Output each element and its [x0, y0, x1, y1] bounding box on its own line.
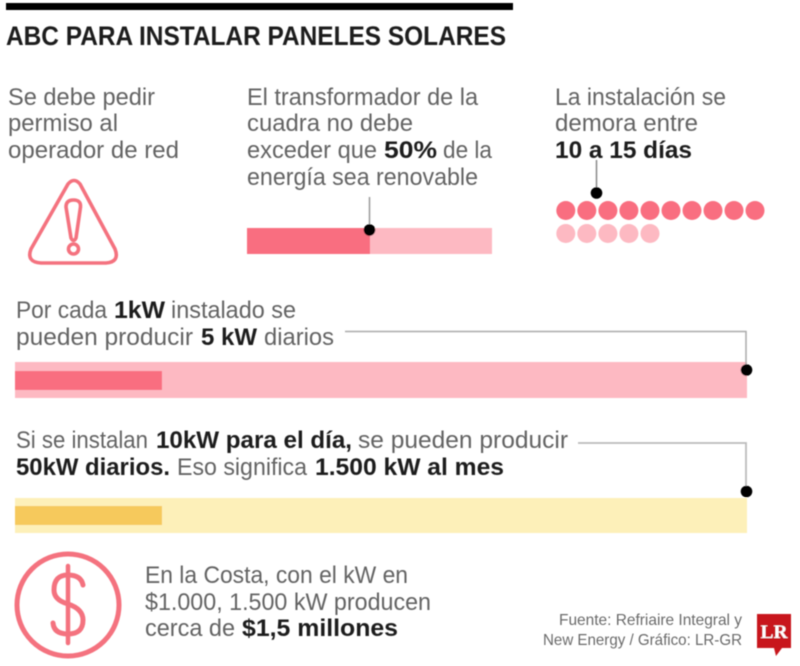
panel: transformer — [247, 84, 493, 254]
source credit — [543, 612, 742, 649]
text: savings — [145, 562, 431, 642]
text: 10 kW production: 50kW diarios. — [16, 454, 170, 481]
source credit: Fuente: Refriaire Integral y — [559, 612, 742, 629]
text: installation days: 10 a 15 días — [555, 137, 692, 164]
source credit: New Energy / Gráfico: LR-GR — [543, 632, 742, 649]
panel: 10 kW production — [15, 427, 752, 533]
text: 10 kW production: 1.500 kW al mes — [315, 454, 504, 481]
panel: installation days — [555, 84, 764, 243]
text: 1 kW production: Por cada — [16, 297, 108, 324]
text: savings: En la Costa, con el kW en — [145, 562, 408, 589]
text: 10 kW production: se pueden producir — [358, 427, 568, 454]
text: transformer: El transformador de la — [247, 84, 479, 111]
text: transformer: energía sea renovable — [247, 164, 478, 191]
text: installation days: La instalación se — [555, 84, 726, 111]
text: 1 kW production — [16, 297, 334, 351]
title: ABC PARA INSTALAR PANELES SOLARES — [6, 21, 506, 51]
logo: LR: LR — [760, 622, 788, 643]
panel: permit — [8, 84, 179, 263]
text: permit — [8, 84, 179, 164]
panel: 1 kW production — [15, 297, 752, 398]
text: 10 kW production: Si se instalan — [16, 427, 148, 454]
bar: 10 kW vs 50 kW — [15, 443, 752, 533]
bar: 50 percent — [247, 197, 492, 254]
text: 1 kW production: 1kW — [114, 297, 165, 324]
panel: savings — [17, 554, 431, 656]
text: 1 kW production: 5 kW — [201, 324, 257, 351]
text: installation days — [555, 84, 726, 164]
text: transformer: cuadra no debe — [247, 110, 413, 137]
text: savings: $1.000, 1.500 kW producen — [145, 589, 431, 616]
text: savings: cerca de — [145, 615, 235, 642]
text: transformer: exceder que — [247, 137, 377, 164]
text: transformer: 50% — [384, 137, 437, 164]
top rule — [6, 3, 513, 10]
text: permit: permiso al — [8, 110, 118, 137]
text: savings: $1,5 millones — [242, 615, 398, 642]
text: permit: Se debe pedir — [8, 84, 155, 111]
text: transformer — [247, 84, 493, 191]
logo: LR — [757, 614, 791, 656]
text: 10 kW production: Eso significa — [177, 454, 308, 481]
text: 10 kW production — [16, 427, 568, 481]
text: 1 kW production: instalado se — [171, 297, 296, 324]
text: transformer: de la — [443, 137, 493, 164]
dot chart: days — [556, 160, 764, 243]
text: 10 kW production: 10kW para el día, — [156, 427, 352, 454]
icon: dollar coin — [17, 554, 119, 656]
icon: warning triangle — [30, 180, 116, 263]
text: 1 kW production: pueden producir — [16, 324, 193, 351]
text: 1 kW production: diarios — [264, 324, 334, 351]
text: permit: operador de red — [8, 137, 179, 164]
text: installation days: demora entre — [555, 110, 698, 137]
bar: 1 kW vs 5 kW — [15, 332, 752, 398]
